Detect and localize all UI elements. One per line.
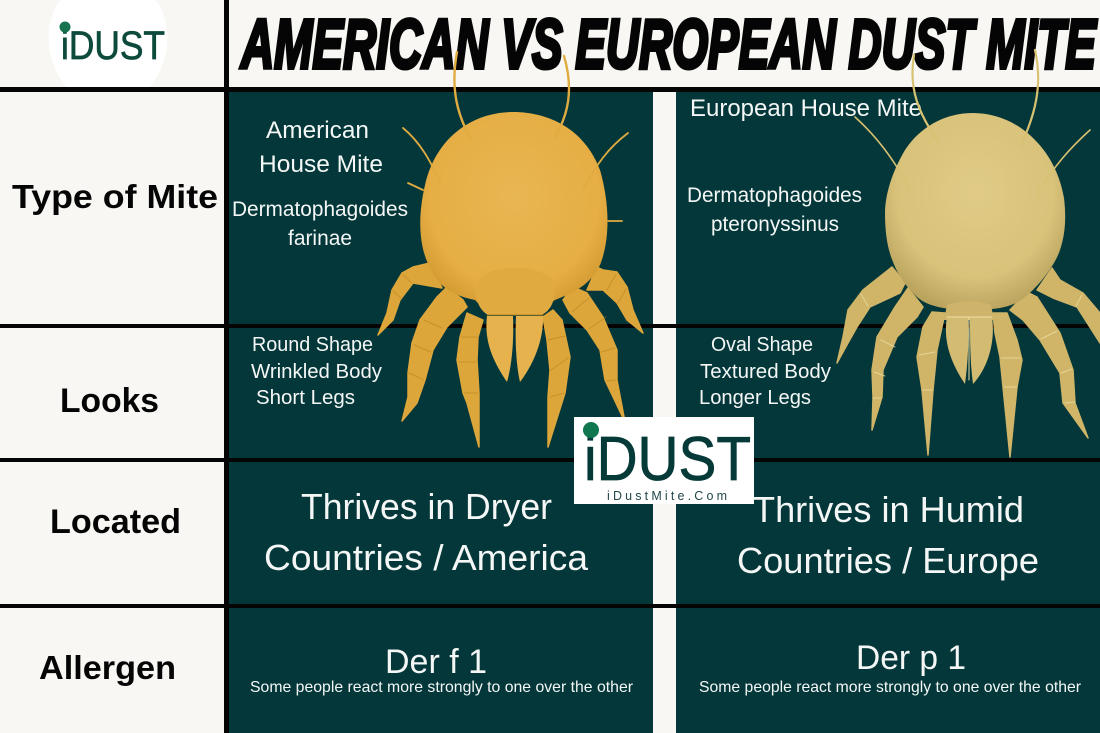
header logo bbox=[49, 0, 167, 87]
American located text: Thrives in Dryer bbox=[301, 486, 552, 527]
American name text bbox=[232, 117, 408, 250]
American dust mite bbox=[378, 52, 643, 447]
center logo: iDUST bbox=[584, 425, 751, 494]
European name text bbox=[687, 95, 922, 236]
European mite palps bbox=[946, 317, 968, 384]
American name text: House Mite bbox=[259, 151, 383, 178]
row label: type of mite: Type of Mite bbox=[12, 178, 218, 215]
European dust mite bbox=[837, 50, 1100, 457]
row label: located: Located bbox=[50, 503, 181, 541]
American mite legs bbox=[378, 263, 643, 447]
European mite head bbox=[944, 301, 994, 320]
American looks text bbox=[251, 334, 382, 409]
panel: European allergen bbox=[676, 608, 1100, 733]
European name text: pteronyssinus bbox=[711, 213, 839, 236]
American mite head bbox=[475, 268, 555, 315]
European mite hairs bbox=[855, 50, 1090, 194]
American allergen text bbox=[250, 643, 634, 696]
panel: American looks bbox=[229, 328, 653, 458]
American name text: farinae bbox=[288, 227, 352, 250]
panel: American type of mite bbox=[229, 92, 653, 324]
American located text: Countries / America bbox=[264, 537, 589, 578]
European located text: Thrives in Humid bbox=[753, 489, 1024, 530]
European mite leg seams bbox=[861, 294, 1082, 403]
European allergen text: Der p 1 bbox=[856, 639, 966, 677]
European allergen text: Some people react more strongly to one over the other bbox=[699, 679, 1082, 696]
American mite hairs bbox=[403, 52, 628, 221]
American mite body bbox=[420, 112, 608, 314]
American name text: American bbox=[266, 117, 369, 144]
European looks text: Oval Shape bbox=[711, 334, 813, 356]
American located text bbox=[264, 486, 589, 578]
American name text: Dermatophagoides bbox=[232, 198, 408, 221]
row label: allergen: Allergen bbox=[39, 649, 176, 686]
American allergen text: Some people react more strongly to one over the other bbox=[250, 679, 634, 696]
European mite body bbox=[885, 113, 1065, 310]
European located text: Countries / Europe bbox=[737, 540, 1039, 581]
American looks text: Short Legs bbox=[256, 387, 355, 409]
European name text: European House Mite bbox=[690, 95, 922, 122]
panel: American located bbox=[229, 462, 653, 604]
European allergen text bbox=[699, 639, 1082, 696]
European looks text: Longer Legs bbox=[699, 387, 811, 409]
European name text: Dermatophagoides bbox=[687, 184, 862, 207]
panel: European type of mite bbox=[676, 92, 1100, 324]
header logo: iDUST bbox=[61, 24, 165, 68]
American mite leg seams bbox=[393, 274, 626, 397]
American mite palps bbox=[486, 316, 513, 382]
panel: European located bbox=[676, 462, 1100, 604]
American allergen text: Der f 1 bbox=[385, 643, 487, 681]
American looks text: Wrinkled Body bbox=[251, 361, 382, 383]
row label: looks: Looks bbox=[60, 382, 159, 420]
panel: American allergen bbox=[229, 608, 653, 733]
European looks text bbox=[699, 334, 831, 409]
European mite legs bbox=[837, 267, 1100, 457]
panel: European looks bbox=[676, 328, 1100, 458]
American looks text: Round Shape bbox=[252, 334, 373, 356]
center logo: iDustMite.Com bbox=[607, 489, 727, 503]
European looks text: Textured Body bbox=[700, 361, 831, 383]
European located text bbox=[737, 489, 1039, 581]
